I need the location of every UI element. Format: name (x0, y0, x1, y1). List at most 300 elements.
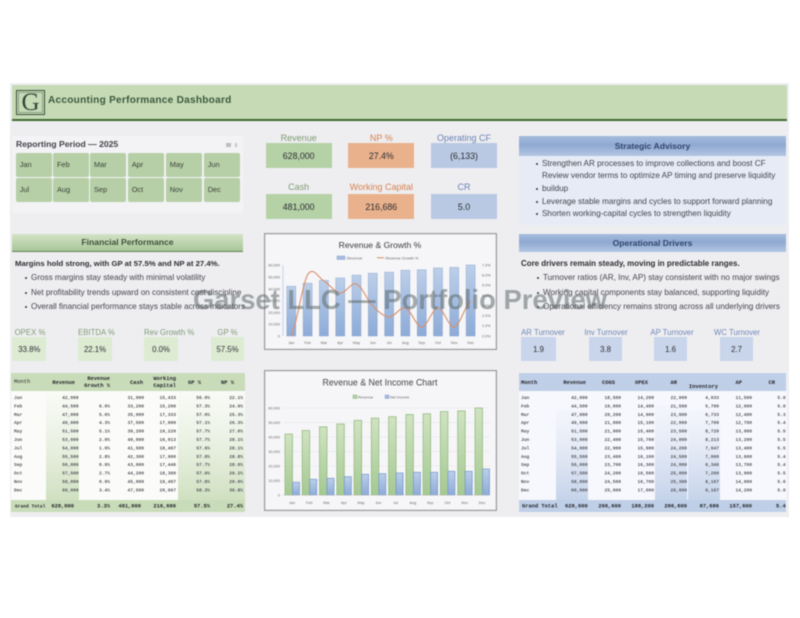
month labels: Jun (370, 341, 376, 345)
table rows: 7,647 (705, 445, 719, 451)
left axis labels: 60,000 (268, 264, 280, 268)
table header: Revenue (52, 380, 75, 386)
left axis labels: 50,000 (268, 276, 280, 280)
KPI value: CR: 5.0 (458, 202, 470, 212)
KPI label: AR Turnover: AR Turnover (521, 328, 565, 337)
table rows: Jan (14, 395, 23, 401)
KPI value: OPEX % (12, 337, 46, 361)
month labels: Aug (410, 501, 416, 505)
month labels: Jan (288, 341, 294, 345)
table rows: 28.1% (229, 445, 243, 451)
month labels: Apr (341, 501, 347, 505)
table rows: 47,000 (62, 412, 79, 418)
slicer months: Feb (57, 160, 70, 169)
chart legend: Revenue Growth % (386, 256, 419, 260)
table rows: 57.7% (196, 429, 210, 435)
table header: COGS (602, 380, 616, 386)
table rows: 44,500 (62, 403, 79, 409)
table rows: 7,260 (705, 471, 719, 477)
table rows: Aug (521, 454, 530, 460)
KPI label: OPEX %: OPEX % (15, 328, 45, 337)
table rows: 26,000 (670, 487, 687, 493)
table header: Inventory (689, 384, 719, 390)
table rows: 45,000 (127, 479, 144, 485)
table rows: 24,500 (604, 479, 621, 485)
heading: operational drivers (519, 234, 786, 252)
KPI value: Revenue (266, 143, 332, 168)
table rows: 15,700 (637, 437, 654, 443)
table rows: 9,167 (705, 487, 719, 493)
driver bullets: Operational efficiency remains strong across all underlying drivers (543, 302, 780, 311)
table rows: 42,000 (62, 395, 79, 401)
table rows: 6,733 (705, 412, 719, 418)
table rows: 57.7% (196, 462, 210, 468)
table rows: 17,900 (159, 454, 176, 460)
KPI label: Revenue: Revenue (281, 133, 317, 143)
table rows: 2.7% (99, 471, 110, 477)
table rows: 57.8% (196, 454, 210, 460)
panel: financial performance (11, 234, 246, 362)
KPI value: AP Turnover: 1.6 (665, 344, 676, 354)
month labels: Nov (461, 501, 468, 505)
left axis labels: 20,000 (268, 311, 280, 315)
table rows: 25,000 (670, 471, 687, 477)
table rows: 42,000 (571, 395, 588, 401)
month labels: Jun (375, 501, 381, 505)
KPI label: Operating CF: Operating CF (437, 133, 491, 143)
month labels: Feb (306, 501, 313, 505)
table rows: 2.9% (99, 437, 110, 443)
right axis labels: 2.0% (482, 314, 491, 318)
table rows: 24,000 (670, 437, 687, 443)
table rows: 5.0 (777, 403, 786, 409)
chart: revenue and net income (264, 370, 498, 512)
table rows: Jul (521, 445, 530, 451)
table rows: Oct (14, 471, 23, 477)
table rows: 17,333 (159, 412, 176, 418)
KPI value: OPEX %: 33.8% (18, 344, 40, 354)
table rows: 57.6% (196, 445, 210, 451)
left axis labels (268, 406, 280, 498)
chart legend: Revenue (347, 256, 362, 260)
slicer months: Dec (208, 185, 221, 194)
table rows: 39,200 (127, 429, 144, 435)
KPI label: Cash: Cash (288, 182, 309, 192)
table rows (521, 395, 786, 493)
grand total row: 628,000 (51, 504, 74, 510)
table rows: 5.0 (777, 395, 786, 401)
month labels: Feb (304, 341, 311, 345)
table rows: Nov (521, 479, 530, 485)
table rows: 22,000 (670, 395, 687, 401)
performance bullets: Overall financial performance stays stable across indicators (31, 302, 245, 311)
driver bullets (536, 273, 780, 312)
table rows: Mar (521, 412, 530, 418)
slicer months: Oct (132, 185, 143, 194)
table rows: 22,900 (604, 445, 621, 451)
left axis labels: 20,000 (268, 464, 280, 468)
table rows: 23,400 (604, 454, 621, 460)
heading: strategic advisory: Strategic Advisory (615, 141, 690, 151)
slicer months: Nov (170, 185, 183, 194)
performance bullets: Gross margins stay steady with minimal volatility (31, 273, 205, 282)
table rows: 5.1% (99, 429, 110, 435)
table rows: 5.0 (777, 487, 786, 493)
table rows: 60,000 (62, 487, 79, 493)
table rows: 2.8% (99, 454, 110, 460)
KPI value: NP % (348, 143, 414, 168)
logo (16, 90, 45, 115)
table rows: 55,500 (62, 454, 79, 460)
panel: strategic advisory (519, 136, 786, 225)
table rows: Apr (521, 420, 530, 426)
KPI value: CR (431, 194, 497, 219)
heading: strategic advisory (519, 136, 786, 156)
table header: AP (736, 380, 742, 386)
table rows: 5.4 (777, 420, 786, 426)
panel: headline KPI cards (266, 133, 498, 220)
table rows: 44,500 (571, 403, 588, 409)
KPI label: CR: CR (458, 182, 470, 192)
slicer months (16, 152, 240, 202)
table rows: 1.9% (99, 445, 110, 451)
table rows: May (521, 429, 530, 435)
heading: operational drivers: Operational Drivers (613, 238, 692, 248)
KPI value: AR Turnover: 1.9 (533, 344, 544, 354)
driver bullets: Working capital components stay balanced, supporting liquidity (543, 288, 769, 297)
table header: Month (14, 379, 30, 385)
grand total row: 188,200 (631, 504, 654, 510)
table rows: 29.0% (229, 479, 243, 485)
table rows: 19,000 (604, 403, 621, 409)
table rows: 5.4 (777, 462, 786, 468)
table rows: 57.1% (196, 420, 210, 426)
table rows: 5.5 (777, 445, 786, 451)
grand total row (11, 500, 245, 512)
table rows: 7,700 (705, 420, 719, 426)
table rows: 28.8% (229, 454, 243, 460)
table rows: Apr (14, 420, 23, 426)
right axis labels: 3.0% (482, 304, 491, 308)
table rows: 57.9% (196, 471, 210, 477)
table rows: 23,700 (604, 462, 621, 468)
table rows: Mar (14, 412, 23, 418)
table rows: 12,700 (735, 420, 752, 426)
KPI value: Inv Turnover (589, 337, 622, 361)
chart title: Revenue & Growth % (339, 240, 422, 250)
table rows: 4.3% (99, 420, 110, 426)
performance bullets: Net profitability trends upward on consistent cost discipline (31, 288, 241, 297)
table header: Revenue (563, 380, 586, 386)
month labels: May (353, 341, 360, 345)
table rows: 37,500 (127, 420, 144, 426)
table rows: 17,000 (159, 420, 176, 426)
table rows: 15,100 (637, 420, 654, 426)
month labels: Jul (393, 501, 398, 505)
table rows: 19,467 (159, 479, 176, 485)
slicer months: May (170, 160, 184, 169)
table rows: 49,000 (571, 420, 588, 426)
title: Accounting Performance Dashboard (48, 95, 232, 106)
KPI value: EBITDA % (78, 337, 112, 361)
table rows: 33,200 (127, 403, 144, 409)
left axis labels (268, 264, 280, 338)
table rows: 18,360 (159, 471, 176, 477)
table rows: 5.3 (777, 412, 786, 418)
table rows: 8,720 (705, 429, 719, 435)
KPI value: Working Capital (348, 194, 414, 219)
table rows: 16,100 (637, 454, 654, 460)
left axis labels: 0 (278, 494, 280, 498)
table rows: 5.5 (777, 429, 786, 435)
table rows: Nov (14, 479, 23, 485)
table rows: 30.8% (229, 487, 243, 493)
table rows: 60,000 (571, 487, 588, 493)
table: monthly operating drivers (518, 372, 786, 512)
chart legend (337, 256, 419, 260)
KPI value: WC Turnover (720, 337, 753, 361)
revenue bars (285, 408, 482, 495)
left axis labels: 0 (278, 334, 280, 338)
table header: NP % (221, 380, 235, 386)
advisory bullets: Leverage stable margins and cycles to support forward planning (542, 196, 772, 206)
slicer control icons (226, 143, 239, 147)
table rows: 22,400 (604, 437, 621, 443)
KPI value: GP %: 57.5% (216, 344, 239, 354)
table rows: 20,967 (159, 487, 176, 493)
grand total row: 628,000 (565, 504, 588, 510)
table header: OPEX (635, 380, 649, 386)
right axis labels: 1.0% (482, 324, 491, 328)
grand total row: 286,600 (664, 504, 687, 510)
month labels: Sep (418, 341, 425, 345)
KPI value: Cash: 481,000 (283, 202, 315, 212)
month labels: Jan (289, 501, 295, 505)
driver bullets: Turnover ratios (AR, Inv, AP) stay consistent with no major swings (543, 273, 780, 282)
grand total row: Grand Total (522, 504, 558, 510)
slicer months: Apr (132, 160, 143, 169)
table rows: 0.9% (99, 462, 110, 468)
table rows: 24,200 (670, 445, 687, 451)
table rows: Dec (14, 487, 23, 493)
KPI value: Working Capital: 216,686 (365, 202, 397, 212)
table rows: 54,000 (62, 445, 79, 451)
table rows: 15,433 (159, 395, 176, 401)
KPI value: Rev Growth %: 0.0% (152, 344, 170, 354)
slicer months: Jun (208, 160, 220, 169)
table rows: 57,500 (571, 471, 588, 477)
table rows: 28.6% (229, 462, 243, 468)
table rows: 15,200 (159, 403, 176, 409)
left axis labels: 10,000 (268, 322, 280, 326)
grand total row: 57.5% (194, 504, 211, 510)
month labels: Aug (402, 341, 409, 345)
right axis labels: 6.0% (482, 274, 491, 278)
net income bars (292, 469, 490, 495)
month labels: May (357, 501, 365, 505)
table rows: 23,000 (670, 412, 687, 418)
KPI value: AR Turnover (521, 337, 556, 361)
month labels: Mar (321, 341, 328, 345)
table rows: 25,300 (670, 479, 687, 485)
table rows: 24,000 (670, 462, 687, 468)
summary sentence: Core drivers remain steady, moving in predictable ranges. (521, 259, 740, 268)
table rows: 21,900 (604, 429, 621, 435)
table rows: Aug (14, 454, 23, 460)
table rows: 8,213 (705, 437, 719, 443)
table rows: 13,600 (735, 454, 752, 460)
table rows: Feb (521, 403, 530, 409)
table rows: 16,500 (637, 471, 654, 477)
right axis labels: 5.0% (482, 284, 491, 288)
table rows: 15,900 (637, 445, 654, 451)
table header: Month (521, 380, 537, 386)
grand total row: Grand Total (15, 504, 46, 510)
table rows: 56,000 (62, 462, 79, 468)
table rows: 55,500 (571, 454, 588, 460)
table rows: 29.2% (229, 471, 243, 477)
KPI label: Working Capital: Working Capital (350, 182, 413, 192)
table rows: 44,200 (127, 471, 144, 477)
table rows: 18,467 (159, 445, 176, 451)
grand total row: 27.4% (227, 504, 244, 510)
advisory bullets: Shorten working-capital cycles to strengthen liquidity (542, 209, 731, 218)
slicer months: Jul (20, 185, 29, 194)
table rows: Jun (521, 437, 530, 443)
table rows: 51,500 (571, 429, 588, 435)
chart legend: Revenue (358, 396, 373, 400)
slicer months: Sep (94, 185, 107, 194)
table rows: 13,700 (735, 462, 752, 468)
table rows: 24,500 (670, 454, 687, 460)
performance bullets (24, 273, 246, 312)
table header: Cash (130, 380, 143, 386)
left axis labels: 30,000 (268, 450, 280, 454)
table rows: 6,346 (705, 462, 719, 468)
grand total row: 3.3% (97, 504, 111, 510)
chart legend (353, 395, 409, 400)
table rows: Jul (14, 445, 23, 451)
advisory bullets (535, 158, 776, 218)
month labels: Oct (444, 501, 451, 505)
table rows: 40,000 (127, 437, 144, 443)
table rows: 13,900 (735, 471, 752, 477)
grand total row: 216,686 (153, 504, 176, 510)
table rows: 5,700 (705, 403, 719, 409)
table rows: 18,500 (604, 395, 621, 401)
table rows: 24.9% (229, 403, 243, 409)
table rows: 58,000 (571, 479, 588, 485)
table rows: 17,446 (159, 462, 176, 468)
KPI label: GP %: GP % (217, 328, 238, 337)
table rows: 43,000 (127, 462, 144, 468)
table rows: 17,000 (637, 487, 654, 493)
table rows: 15,400 (637, 429, 654, 435)
grand total row: 157,600 (729, 504, 752, 510)
KPI label: NP %: NP % (370, 133, 393, 143)
table rows: May (14, 429, 23, 435)
table rows: Dec (521, 487, 530, 493)
table rows: 16,300 (637, 462, 654, 468)
left axis labels: 10,000 (268, 479, 280, 483)
advisory bullets: Strengthen AR processes to improve collections and boost CF (542, 158, 766, 168)
panel: reporting period slicer (12, 136, 243, 213)
watermark: Garset LLC — Portfolio Preview (193, 284, 607, 315)
KPI value: EBITDA %: 22.1% (84, 344, 106, 354)
grand total row: 87,686 (700, 504, 719, 510)
month labels (288, 341, 474, 345)
table rows: 24,200 (604, 471, 621, 477)
KPI value: Inv Turnover: 3.8 (600, 344, 611, 354)
table rows: 5.5 (777, 471, 786, 477)
table rows: 25.3% (229, 412, 243, 418)
month labels: Oct (435, 341, 442, 345)
dashboard background (10, 83, 789, 517)
table rows: 26.3% (229, 420, 243, 426)
left axis labels: 40,000 (268, 436, 280, 440)
right axis labels: 7.0% (482, 264, 491, 268)
grand total row: 266,600 (598, 504, 621, 510)
table rows: 6.0% (99, 403, 110, 409)
table rows: 21,500 (670, 403, 687, 409)
table rows: 14,200 (735, 487, 752, 493)
table rows: 19,220 (159, 429, 176, 435)
month labels: Sep (427, 501, 433, 505)
month labels: Dec (479, 501, 485, 505)
table rows: 5.6% (99, 412, 110, 418)
panel: operational drivers (518, 234, 786, 362)
left axis labels: 50,000 (268, 421, 280, 425)
advisory bullets: buildup (542, 184, 568, 193)
left axis labels: 30,000 (268, 299, 280, 303)
table rows: 3.4% (99, 487, 110, 493)
table header (11, 373, 245, 391)
table rows: 8,167 (705, 479, 719, 485)
right axis labels (482, 264, 491, 338)
table rows: 47,000 (571, 412, 588, 418)
table rows: 16,013 (159, 437, 176, 443)
KPI label: Inv Turnover: Inv Turnover (584, 328, 628, 337)
table: monthly financial performance (10, 372, 246, 512)
chart legend: Net Income (390, 396, 409, 400)
table rows: 5.4 (777, 454, 786, 460)
table rows: 13,000 (735, 429, 752, 435)
table rows: 31,000 (127, 395, 144, 401)
table rows: 0.9% (99, 479, 110, 485)
chart: revenue and growth (264, 232, 498, 350)
table rows: 56,000 (571, 462, 588, 468)
table rows: 41,500 (127, 445, 144, 451)
table rows: 28.1% (229, 437, 243, 443)
table header: Capital (153, 383, 177, 389)
table rows: 47,500 (127, 487, 144, 493)
table header: Revenue (87, 376, 110, 382)
table header (519, 373, 786, 391)
right axis labels: 0.0% (482, 334, 491, 338)
table rows: 57.0% (196, 412, 210, 418)
revenue growth line (291, 271, 471, 336)
KPI value: Operating CF (431, 143, 497, 168)
header banner (12, 85, 787, 121)
table rows: 53,000 (62, 437, 79, 443)
table rows: 5.6 (777, 479, 786, 485)
table rows: 57,500 (62, 471, 79, 477)
table rows: 57.8% (196, 479, 210, 485)
month labels: Dec (467, 341, 474, 345)
table rows: 25,000 (604, 487, 621, 493)
chart title: Revenue & Net Income Chart (323, 378, 438, 388)
table rows: Jan (521, 395, 530, 401)
